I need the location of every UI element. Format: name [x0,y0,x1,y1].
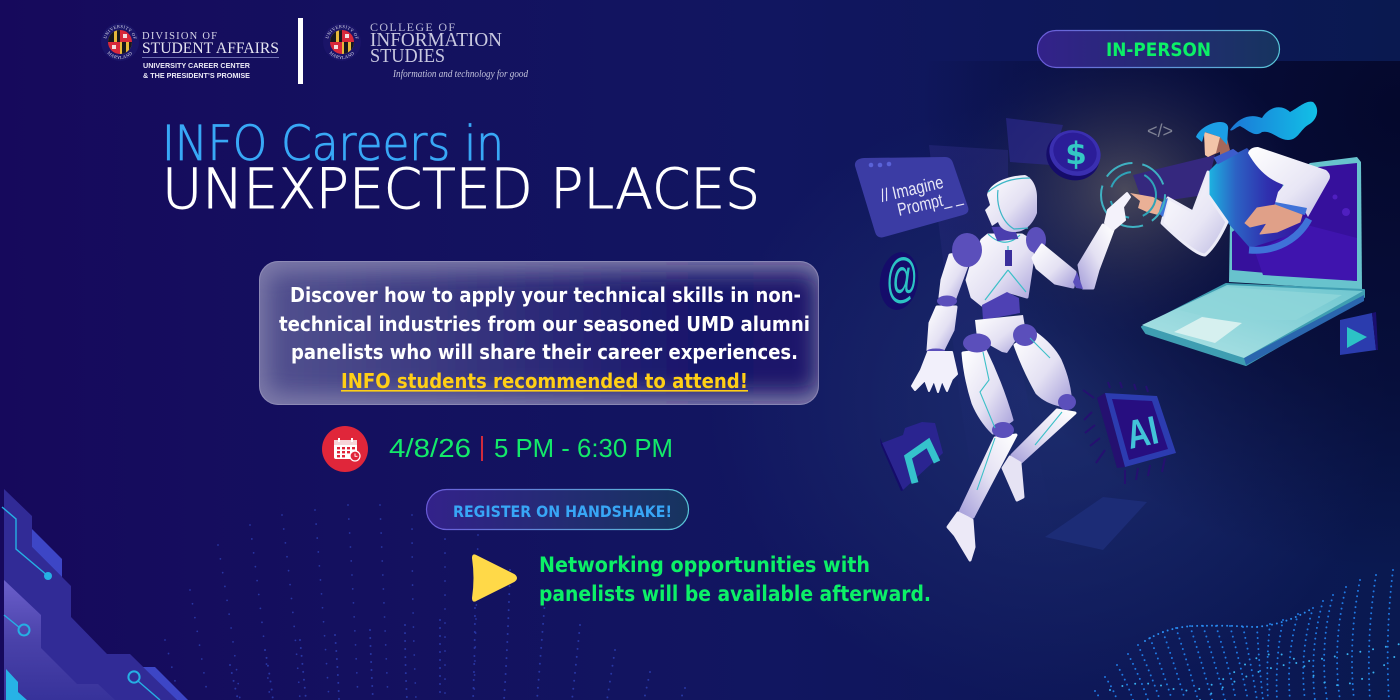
logo: College of Information Studies: COLLEGE OF [370,20,455,34]
seal [101,23,139,61]
title [162,116,760,221]
shoulders [952,233,982,267]
hand [912,352,957,392]
dotted wave, bottom right [1095,570,1400,700]
logo: Division of Student Affairs: STUDENT AFFAIRS [142,40,279,57]
badge: in-person [1038,30,1280,68]
button: register: REGISTER ON HANDSHAKE! [453,502,672,521]
icon: AI chip: AI [1123,408,1162,458]
face [1204,130,1230,158]
illustration: robot and laptop [855,102,1378,560]
date and time: 5 PM - 6:30 PM [494,433,673,463]
seal: UNIVERSITY OF [104,25,137,39]
screen [1229,157,1362,290]
badge: in-person: IN-PERSON [1106,39,1211,61]
icon: prompt card [855,157,968,237]
belt [1249,219,1309,250]
seal: MARYLAND [107,51,132,60]
icon: calendar [322,426,368,472]
base [1142,284,1364,365]
title: UNEXPECTED PLACES [162,157,760,221]
near arm [1033,245,1075,287]
logo: College of Information Studies: INFORMATION [370,29,502,51]
logo divider [298,18,303,84]
cuff [1274,202,1307,215]
torso [967,235,1033,305]
faint dot field, bottom centre [165,505,685,700]
touch rings [1101,163,1165,227]
seal: MARYLAND [329,51,354,60]
button: register [426,490,688,530]
logo: College of Information Studies: STUDIES [370,45,445,67]
icon: prompt card: Prompt_ _ [895,185,965,221]
far arm [940,253,968,298]
collar [1215,150,1237,163]
right leg [1015,333,1070,405]
description text: panelists who will share their career experiences. [291,340,798,364]
logo: College of Information Studies [324,20,529,80]
neck [993,227,1017,240]
laptop [1142,157,1364,365]
translucent panels [929,118,1215,560]
waist [982,292,1020,320]
logo: Division of Student Affairs [101,23,279,80]
seal [324,24,360,60]
description text: Discover how to apply your technical skills in non- [290,283,801,307]
description text: technical industries from our seasoned UMD alumni [279,312,810,336]
hand on hip [1245,205,1302,234]
pants [1255,225,1357,281]
cuff [1157,198,1168,217]
icon: code tag: </> [1147,121,1173,141]
logo: Division of Student Affairs: UNIVERSITY CAREER CENTER [143,61,251,70]
icon: AI chip [1083,382,1176,484]
date and time: 4/8/26 [389,433,471,463]
left leg [963,350,1012,433]
circuit base shape [4,489,177,700]
panel: description [259,261,819,405]
networking note: panelists will be available afterward. [539,582,931,606]
corner circuit graphic, bottom left [2,489,188,700]
networking note [539,553,931,606]
robot [912,175,1130,560]
date and time [389,433,673,463]
head [985,175,1037,232]
hair cap [1196,122,1228,145]
icon: play tile [1340,312,1378,355]
background [632,0,1400,700]
icon: dollar coin: $ [1065,136,1087,172]
title: INFO Careers in [162,116,504,172]
icon: at sign: @ [886,248,918,308]
sleeve: hip arm [1248,147,1330,217]
networking note: Networking opportunities with [539,553,870,577]
logo: Division of Student Affairs: DIVISION OF [142,31,217,42]
icon: prompt card: // Imagine [878,172,945,206]
woman [1130,102,1357,281]
sleeve: pointing arm [1162,172,1227,255]
ponytail [1230,102,1317,140]
pointing hand [1130,193,1162,215]
icon: at sign [876,248,922,312]
logo: Division of Student Affairs: & THE PRESIDENT’S PROMISE [143,71,250,80]
description text [279,283,810,364]
circuit traces [2,507,160,700]
recommendation: INFO students recommended to attend! [341,369,748,393]
vest [1208,148,1307,248]
icon: folder [880,422,943,491]
pointing robot hand [1105,193,1130,230]
logo: College of Information Studies: Information and technology for good [392,69,529,80]
icon: dollar coin [1039,123,1107,188]
pelvis [975,315,1025,353]
icon: yellow arrow [473,555,516,601]
seal: UNIVERSITY OF [326,25,359,39]
